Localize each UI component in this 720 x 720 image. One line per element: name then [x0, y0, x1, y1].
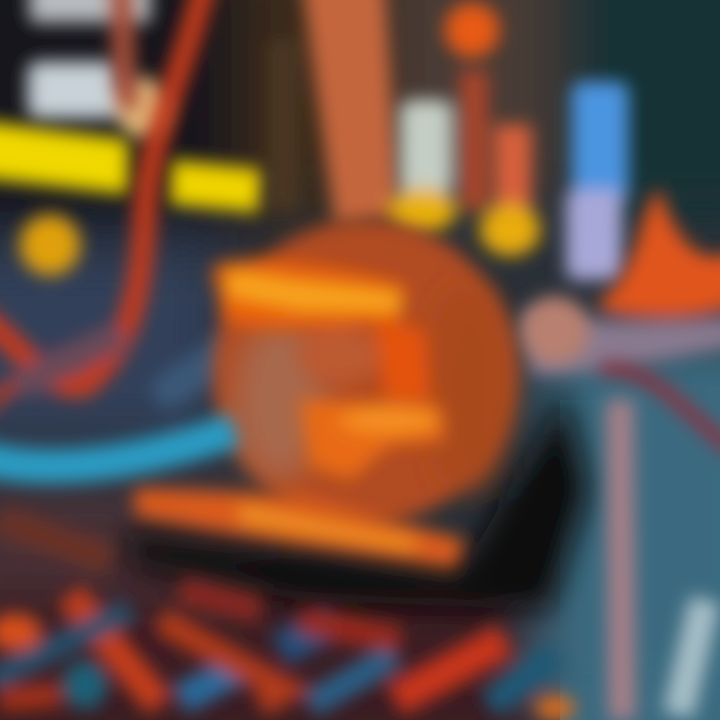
- right orange neon: [525, 190, 720, 375]
- top right lights: [388, 3, 628, 280]
- yellow neon bars: [0, 120, 262, 275]
- large copper disc: [212, 220, 517, 524]
- orange base bar: [135, 488, 465, 568]
- blue neon strip: [0, 430, 235, 466]
- white signs upper left: [28, 0, 168, 138]
- right side lattice: [521, 296, 720, 720]
- floor grid of red and blue: [0, 520, 575, 720]
- copper column: [268, 0, 398, 225]
- dark shadow under disc: [125, 390, 590, 610]
- red neon loop: [0, 0, 230, 410]
